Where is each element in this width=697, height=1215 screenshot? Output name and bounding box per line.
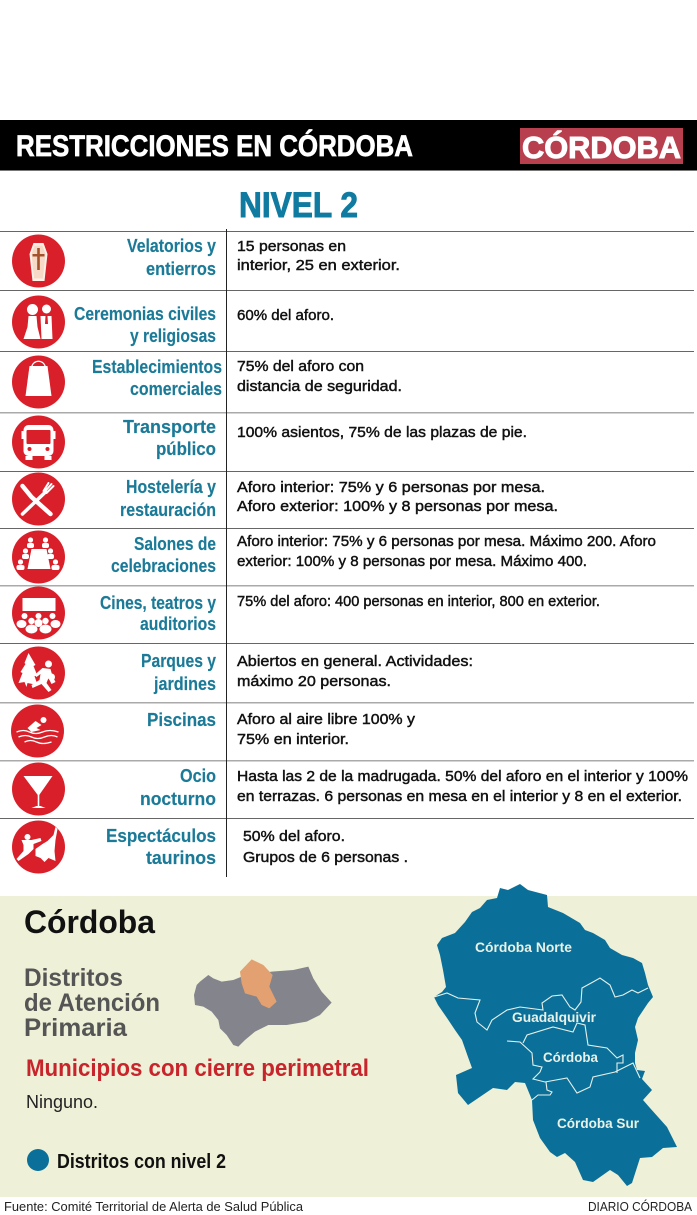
icon: swimmer (11, 704, 64, 758)
text (237, 768, 688, 805)
label: restauración (120, 500, 216, 520)
map: Córdoba districts (434, 884, 677, 1186)
row: hosteleria (12, 472, 558, 526)
text: Aforo al aire libre 100% y (237, 711, 416, 728)
icon: bullfighter (12, 820, 65, 874)
text: 15 personas en (237, 238, 346, 255)
text: distancia de seguridad. (237, 378, 402, 395)
label: Ocio (180, 766, 216, 786)
label (74, 304, 216, 346)
subheading: distritos (24, 964, 160, 1042)
label: Piscinas (147, 710, 216, 730)
icon: knife and fork (12, 472, 65, 526)
subheading: distritos: de Atención (24, 989, 160, 1017)
icon: wedding couple (12, 296, 65, 348)
text (237, 238, 400, 274)
label: Transporte (123, 417, 216, 437)
subheading: distritos: Distritos (24, 964, 123, 992)
text: Abiertos en general. Actividades: (237, 653, 473, 670)
text: Aforo interior: 75% y 6 personas por mesa. Máximo 200. Aforo (237, 533, 656, 550)
label (106, 826, 216, 868)
label (141, 651, 216, 694)
label (111, 534, 216, 576)
text: máximo 20 personas. (237, 673, 391, 690)
label: auditorios (140, 614, 216, 634)
map: Córdoba districts: Guadalquivir (512, 1009, 597, 1025)
label: Cines, teatros y (100, 593, 216, 613)
label: Velatorios y (127, 236, 216, 256)
label: público (156, 439, 216, 459)
text: en terrazas. 6 personas en mesa en el interior y 8 en el exterior. (237, 788, 682, 805)
icon: coffin (12, 234, 65, 288)
label: entierros (146, 259, 216, 279)
label: taurinos (146, 848, 216, 868)
label: nocturno (140, 789, 216, 809)
map: Córdoba districts: Córdoba Sur (557, 1115, 640, 1131)
text (237, 358, 402, 395)
table rules (0, 229, 694, 877)
subheading: municipios: Municipios con cierre perimetral (26, 1055, 369, 1082)
panel: map section (0, 884, 697, 1197)
text: 50% del aforo. (243, 828, 345, 845)
map heading: Córdoba (24, 904, 155, 940)
row: ceremonias (12, 296, 334, 348)
row: piscinas (11, 704, 416, 758)
label (92, 357, 222, 399)
text: 60% del aforo. (237, 307, 334, 324)
text (237, 711, 416, 748)
legend: Distritos con nivel 2 (57, 1151, 226, 1173)
label: comerciales (130, 379, 222, 399)
label (140, 766, 216, 809)
text: 75% del aforo: 400 personas en interior, 800 en exterior. (237, 593, 600, 610)
text: ninguno: Ninguno. (26, 1092, 98, 1112)
label: celebraciones (111, 556, 216, 576)
row: cines (12, 586, 600, 640)
logo: CÓRDOBA (522, 129, 681, 165)
icon: cinema audience (12, 586, 65, 640)
text: 100% asientos, 75% de las plazas de pie. (237, 424, 527, 441)
label (127, 236, 216, 279)
text: Hasta las 2 de la madrugada. 50% del aforo en el interior y 100% (237, 768, 688, 785)
text: exterior: 100% y 8 personas por mesa. Máximo 400. (237, 553, 587, 570)
title: RESTRICCIONES EN CÓRDOBA (16, 129, 413, 163)
label: Establecimientos (92, 357, 222, 377)
text: Aforo interior: 75% y 6 personas por mesa. (237, 479, 545, 496)
label: jardines (153, 674, 216, 694)
label (123, 417, 216, 459)
text (237, 653, 473, 690)
label: Salones de (134, 534, 216, 554)
row: taurinos (12, 820, 408, 874)
header bar (0, 120, 697, 171)
text: 75% del aforo con (237, 358, 364, 375)
label: Hostelería y (126, 477, 216, 497)
label (100, 593, 216, 634)
label: y religiosas (130, 326, 216, 346)
icon: tree and hiker (12, 646, 65, 700)
label: Ceremonias civiles (74, 304, 216, 324)
text (243, 828, 408, 866)
level heading: NIVEL 2 (239, 186, 358, 225)
icon: shopping bag (12, 356, 65, 408)
row: establecimientos (12, 356, 402, 408)
source note: Fuente: Comité Territorial de Alerta de Salud Pública (4, 1199, 304, 1214)
row: velatorios (12, 234, 400, 288)
text (237, 533, 656, 570)
text (237, 479, 558, 515)
icon: bus (12, 416, 65, 468)
row: parques (12, 646, 473, 700)
text: interior, 25 en exterior. (237, 257, 400, 274)
row: ocio nocturno (12, 762, 688, 816)
map: Córdoba districts: Córdoba (543, 1049, 598, 1065)
text: Aforo exterior: 100% y 8 personas por mesa. (237, 498, 558, 515)
subheading: distritos: Primaria (24, 1014, 128, 1042)
text: Grupos de 6 personas . (243, 849, 408, 866)
icon: cocktail glass (12, 762, 65, 816)
label: Parques y (141, 651, 216, 671)
map: Córdoba districts: Córdoba Norte (475, 939, 572, 955)
text: 75% en interior. (237, 731, 349, 748)
label (120, 477, 216, 520)
label: Espectáculos (106, 826, 216, 846)
map: Andalucía locator (194, 959, 332, 1047)
row: transporte (12, 416, 527, 468)
icon: banquet table (12, 530, 65, 584)
row: salones (12, 530, 656, 584)
